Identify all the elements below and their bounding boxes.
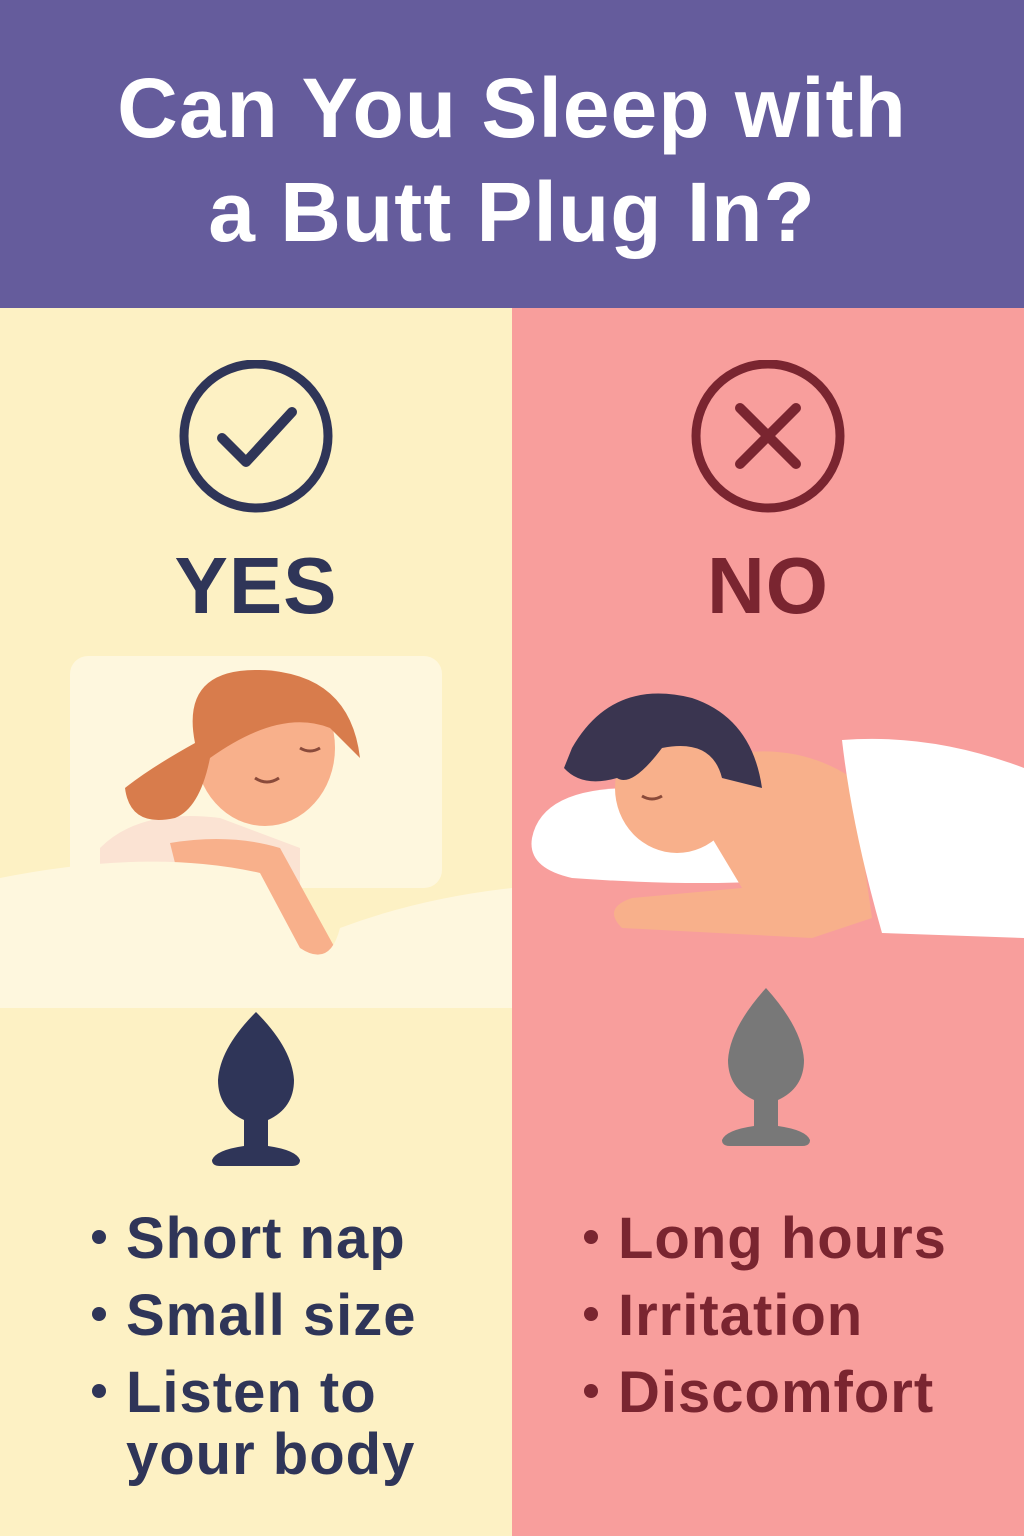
icon: check circle [180, 360, 332, 512]
heading: yes: YES [174, 541, 338, 630]
illustration: sleeping man [532, 694, 1024, 938]
panel: no [512, 308, 1024, 1536]
list: yes: Short nap [126, 1206, 406, 1271]
list: yes: Listen to [126, 1360, 377, 1425]
illustration: sleeping woman [0, 656, 512, 1008]
icon: plug navy [212, 1012, 300, 1166]
list: no: Long hours [618, 1206, 947, 1271]
list: yes: Small size [126, 1283, 416, 1348]
heading: no: NO [707, 541, 829, 630]
list: no [584, 1206, 947, 1425]
title: Can You Sleep with [117, 61, 907, 155]
icon: x circle [692, 360, 844, 512]
title [0, 0, 1024, 308]
list: yes: your body [126, 1422, 415, 1487]
icon: plug gray [722, 988, 810, 1146]
list: no: Irritation [618, 1283, 863, 1348]
list: no: Discomfort [618, 1360, 934, 1425]
title: a Butt Plug In? [208, 165, 816, 259]
panel: yes [0, 308, 512, 1536]
list: yes [92, 1206, 416, 1487]
